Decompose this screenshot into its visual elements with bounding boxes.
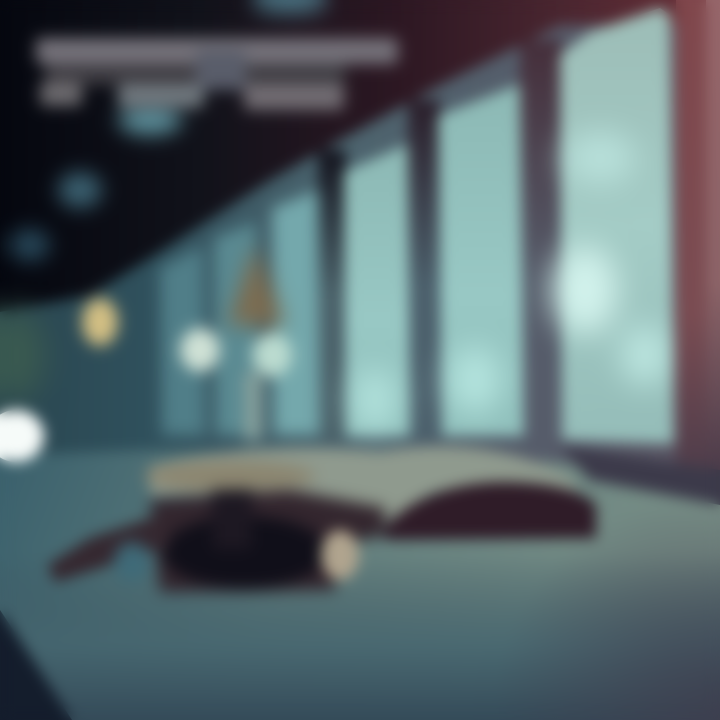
window sill shadow [560, 445, 720, 505]
bundle core [163, 516, 327, 588]
warm page tint [145, 461, 315, 491]
floor [0, 445, 720, 720]
title line one [36, 38, 398, 64]
blue spot [114, 542, 150, 582]
title line two right [244, 84, 344, 110]
dim title backing [45, 60, 345, 85]
title line two centre [118, 84, 204, 108]
blue ceiling lights [10, 0, 328, 261]
title line two left [40, 82, 82, 106]
back wall [0, 0, 720, 500]
title middle column [196, 50, 246, 90]
window highlights [353, 132, 669, 432]
right pillar [676, 0, 720, 480]
window mullions [318, 40, 562, 440]
far windows [160, 190, 320, 435]
open book on table [48, 446, 596, 592]
floor shadow corner [0, 610, 72, 720]
chandelier [180, 245, 292, 440]
beige spot [321, 530, 359, 580]
left green glow [0, 309, 45, 401]
white glow left [0, 410, 44, 462]
book cover [380, 482, 596, 540]
left strap [48, 515, 170, 582]
title: illegible blurred bars [36, 38, 398, 110]
dark bundle [150, 490, 385, 592]
near windows [344, 8, 674, 444]
book pages [150, 446, 580, 526]
ceiling [0, 0, 720, 312]
wall lamp [82, 298, 118, 346]
dark spine [212, 490, 252, 550]
